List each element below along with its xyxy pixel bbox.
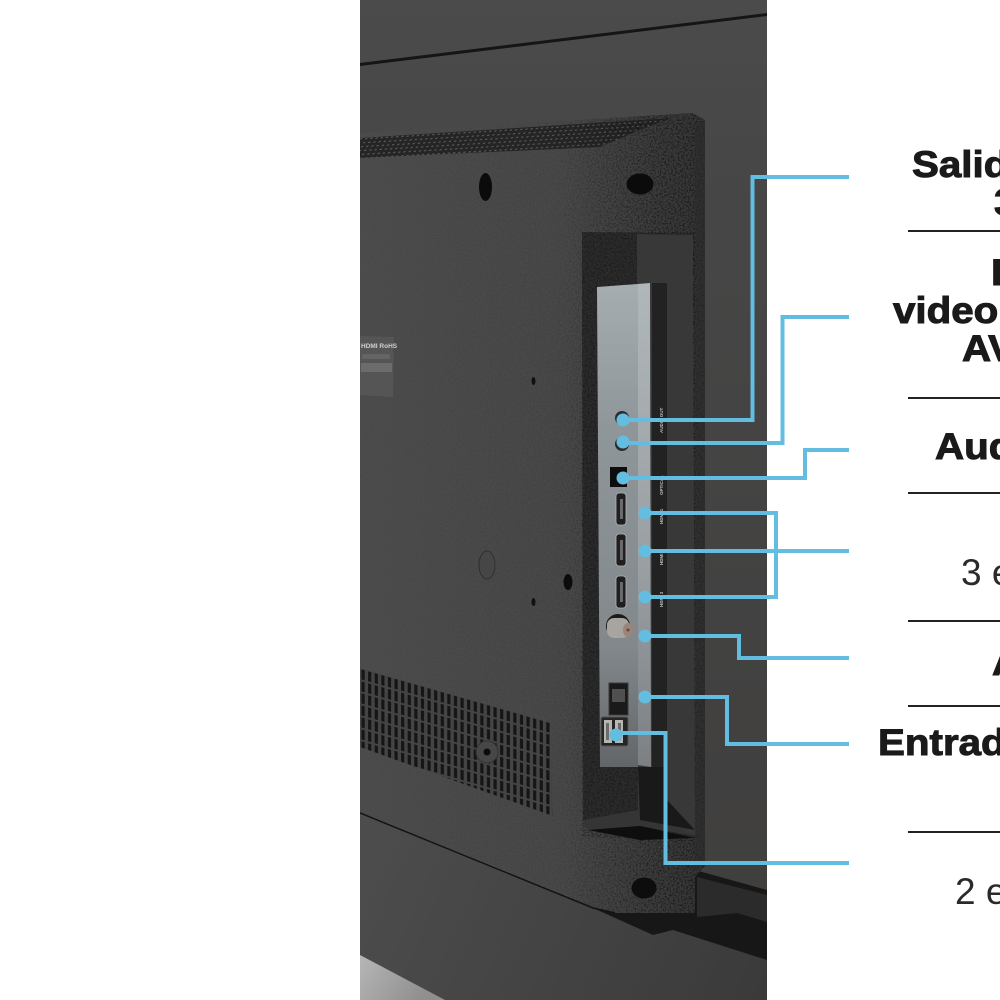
lower body panel xyxy=(360,814,502,1000)
callout line: antenna xyxy=(638,630,849,658)
recess shelf xyxy=(583,810,695,836)
small screw upper xyxy=(532,377,536,385)
port labels: HDMI 1 xyxy=(659,508,664,524)
USB ports xyxy=(601,717,628,746)
rear housing xyxy=(360,113,705,913)
wall behind TV xyxy=(360,0,767,1000)
recess texture xyxy=(582,232,695,838)
callout line: video input xyxy=(616,317,849,448)
mounting hole upper right xyxy=(626,174,654,194)
compliance label: HDMI RoHS xyxy=(361,343,398,350)
port labels: HDMI 2 xyxy=(659,549,664,565)
callout line: ethernet xyxy=(638,690,849,744)
VESA circle xyxy=(479,551,495,579)
vent centre screw xyxy=(476,741,498,763)
callout line: audio output xyxy=(616,177,849,426)
divider lines xyxy=(908,230,1000,833)
photo: back of television xyxy=(360,0,767,1000)
port labels xyxy=(660,408,663,607)
compliance label xyxy=(360,336,398,397)
callout line: optical audio xyxy=(616,450,849,484)
mounting hole lower right xyxy=(632,878,656,898)
HDMI port 2 xyxy=(616,534,626,566)
bottom seam xyxy=(360,813,615,913)
optical port xyxy=(610,467,627,487)
port labels: AUDIO OUT xyxy=(659,408,664,433)
side screw hole xyxy=(564,574,572,590)
right edge strip xyxy=(695,122,705,866)
floor reflection xyxy=(360,955,445,1000)
metal connector plate xyxy=(597,283,651,767)
stand beam xyxy=(697,877,767,922)
label: video input xyxy=(893,252,1000,370)
HDMI port 1 xyxy=(616,493,626,525)
label: video input: video xyxy=(893,290,998,332)
housing texture xyxy=(532,113,705,913)
recess floor shadow xyxy=(588,826,695,840)
shadow under housing xyxy=(593,870,767,960)
ethernet port xyxy=(609,683,628,715)
label: audio output xyxy=(912,144,1000,224)
coaxial antenna port xyxy=(606,614,633,638)
shadow under plate xyxy=(638,767,695,830)
audio jack ports xyxy=(615,411,629,451)
top grille xyxy=(360,118,672,158)
port labels: OPTICAL xyxy=(659,475,664,495)
callout line: USB xyxy=(610,728,849,863)
HDMI port 3 xyxy=(616,576,626,608)
mounting hole upper left xyxy=(479,173,492,201)
plate bent edge xyxy=(638,283,651,767)
upper black frame line xyxy=(360,13,767,66)
connector recess xyxy=(582,232,695,840)
small screw lower xyxy=(532,598,536,606)
callout line: HDMI ports xyxy=(638,506,849,604)
port labels: HDMI 3 xyxy=(659,591,664,607)
recess right wall xyxy=(637,234,695,836)
label strip xyxy=(652,283,667,800)
rear vent grille xyxy=(360,668,553,816)
